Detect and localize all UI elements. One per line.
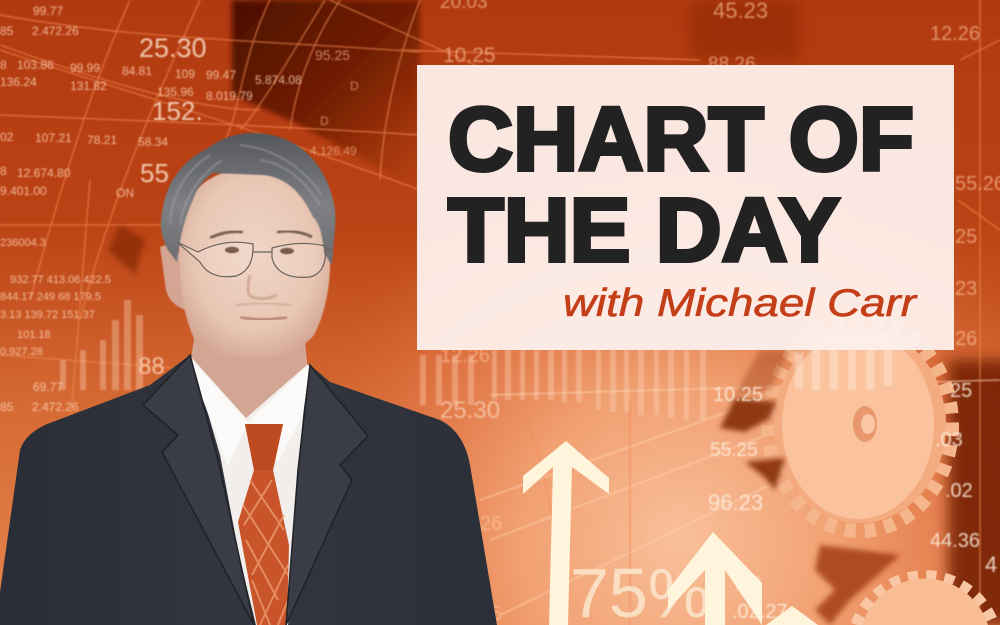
neck — [190, 320, 308, 420]
jacket lapels — [143, 355, 254, 625]
background figures left and top: 0.927.28 — [0, 346, 43, 358]
title card — [417, 65, 954, 350]
background figures left and top: 844.17 249 68 179.5 — [0, 291, 101, 303]
dark jagged spot — [108, 225, 145, 275]
background figures top-right: 25 — [955, 226, 977, 248]
background figures top-right: D — [320, 114, 329, 128]
glasses — [177, 242, 333, 277]
background figures left and top: 85 — [0, 24, 14, 38]
background figures left and top: 02 — [0, 130, 14, 144]
gear number labels: .02 — [945, 480, 973, 502]
background figures left and top — [0, 4, 302, 414]
background figures left and top: 9.401.00 — [0, 184, 47, 198]
background figures left and top: 131.82 — [70, 79, 107, 93]
background figures left and top: 25.30 — [139, 33, 207, 63]
gear number labels: .58 — [735, 574, 761, 595]
background figures left and top: 84.81 — [122, 64, 152, 78]
gear number labels: .03 — [935, 429, 963, 451]
icon: large gear — [768, 319, 952, 531]
background figures top-right: 88.26 — [708, 54, 756, 75]
background figures left and top: 8.019.79 — [206, 89, 253, 103]
background figures left and top: 152. — [152, 96, 203, 126]
background figures left and top: 103.86 — [17, 58, 54, 72]
gear number labels: 55.25 — [710, 440, 758, 461]
background figures left and top: 101.18 — [17, 329, 51, 341]
byline: with Michael Carr — [563, 282, 918, 325]
background figures left and top: 99.47 — [206, 68, 236, 82]
background figures left and top: 8 — [0, 58, 7, 72]
background figures top-right: 10.25 — [443, 44, 496, 67]
necktie — [238, 424, 289, 625]
background figures top-right: 23 — [955, 278, 977, 300]
background figures top-right: 95.25 — [315, 47, 350, 63]
gear number labels: 96.23 — [708, 490, 763, 515]
person: Michael Carr — [0, 133, 497, 625]
background figures left and top: 88 — [138, 353, 165, 380]
gear number labels: 4 — [985, 552, 997, 577]
background figures left and top: 109 — [175, 67, 195, 81]
background figures top-right: 26 — [955, 328, 977, 350]
hair — [161, 133, 335, 265]
dark gear shadow patches — [720, 350, 900, 625]
background figures left and top: 3.13 139.72 151.37 — [0, 309, 95, 321]
background figures top-right: 4,126.49 — [310, 144, 357, 158]
background figures left and top: 107.21 — [35, 131, 72, 145]
background figures left and top: 2.472.26 — [32, 24, 79, 38]
background figures left and top: 932.77 413.06 422.5 — [10, 274, 111, 286]
left ear — [160, 245, 186, 310]
background figures left and top: 8 — [0, 164, 7, 178]
shirt collar — [192, 360, 310, 467]
background figures left and top: 78.21 — [87, 133, 117, 147]
shoulders and jacket — [0, 355, 497, 625]
background figures left and top: 12.674.80 — [17, 166, 71, 180]
background figures left and top: 85 — [0, 400, 14, 414]
background figures top-right: 25.30 — [440, 397, 500, 424]
heading: chart of: CHART OF — [448, 90, 914, 190]
background figures left and top: 99.99 — [70, 61, 100, 75]
background figures left and top: 236004.3 — [0, 237, 46, 249]
vertical chart bars — [60, 300, 706, 420]
background figures left and top: 99.77 — [33, 4, 63, 18]
eyes — [225, 247, 294, 254]
background figures top-right: 25 — [480, 603, 502, 625]
shirt — [192, 358, 308, 625]
background figures left and top: ON — [116, 186, 134, 200]
background figures left and top: 69.77 — [33, 380, 63, 394]
icon: small lower gear — [857, 577, 993, 625]
background figures left and top: 135.96 — [157, 85, 194, 99]
heading: the day: THE DAY — [448, 181, 840, 281]
background figures top-right: D — [350, 79, 359, 93]
background figures left and top: 58.34 — [138, 135, 168, 149]
background figures left and top: 2.472.26 — [32, 400, 79, 414]
background figures left and top: 5.874.08 — [255, 73, 302, 87]
gear number labels: 10.25 — [713, 384, 763, 406]
eyebrows — [210, 231, 312, 238]
gear number labels: 25 — [950, 380, 972, 402]
background figures top-right: 12.26 — [440, 345, 490, 367]
background figures top-right — [310, 0, 1000, 625]
background figures top-right: 26 — [480, 513, 502, 535]
nose — [248, 275, 277, 299]
mouth — [240, 317, 287, 320]
background figures left and top: 55 — [140, 158, 169, 188]
gear number labels — [708, 380, 997, 623]
gear number labels: .02.27 — [732, 601, 788, 623]
hair strands — [170, 145, 322, 225]
background figures left and top: 136.24 — [0, 75, 37, 89]
upward arrows — [523, 441, 818, 625]
gear number labels: 44.36 — [930, 530, 980, 552]
background figures top-right: 12.26 — [930, 23, 980, 45]
face — [178, 168, 330, 358]
